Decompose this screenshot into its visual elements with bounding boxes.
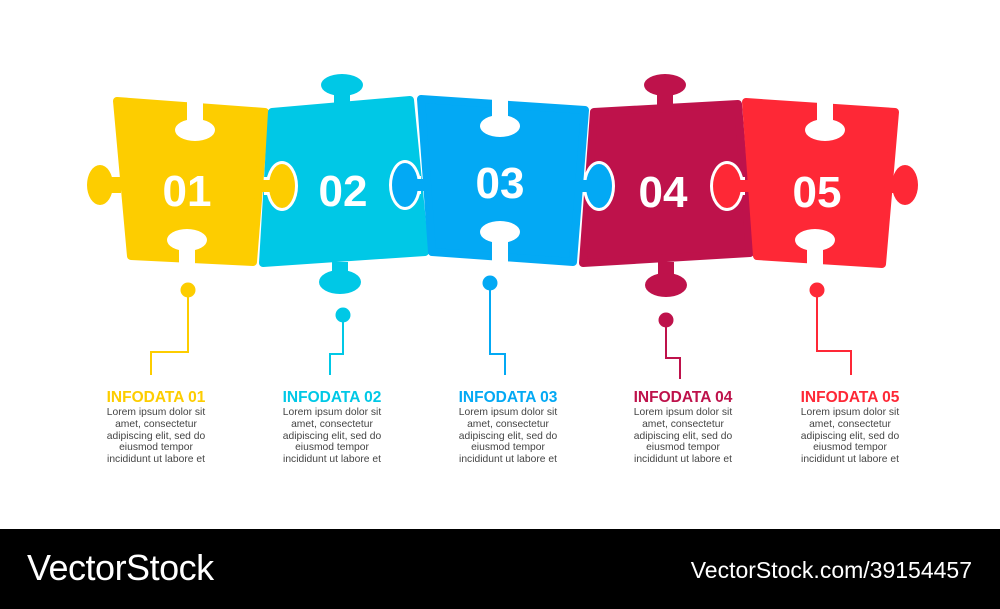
text 1: INFODATA 01 — [107, 389, 205, 406]
footer url: VectorStock.com/39154457 — [691, 557, 972, 583]
text 4: INFODATA 04 — [634, 389, 732, 406]
piece 3 — [421, 95, 585, 262]
connectors — [151, 283, 851, 379]
text 5: INFODATA 05 — [801, 389, 899, 406]
text 2: INFODATA 02 — [283, 389, 381, 406]
text 4: eiusmod tempor — [646, 442, 720, 453]
text 1: adipiscing elit, sed do — [107, 431, 205, 442]
piece 2 — [263, 74, 425, 294]
numbers: 05 — [793, 168, 841, 217]
text 3: Lorem ipsum dolor sit — [459, 407, 557, 418]
text 2: incididunt ut labore et — [283, 454, 381, 465]
text 3: INFODATA 03 — [459, 389, 557, 406]
text 2: adipiscing elit, sed do — [283, 431, 381, 442]
text 4: Lorem ipsum dolor sit — [634, 407, 732, 418]
text 1 — [107, 389, 206, 465]
numbers: 03 — [476, 159, 524, 208]
text 5: eiusmod tempor — [813, 442, 887, 453]
text 5: Lorem ipsum dolor sit — [801, 407, 899, 418]
text 3: amet, consectetur — [467, 419, 549, 430]
text 1: Lorem ipsum dolor sit — [107, 407, 205, 418]
text 1: amet, consectetur — [115, 419, 197, 430]
numbers: 04 — [639, 168, 688, 217]
numbers: 01 — [163, 167, 211, 216]
piece 1 — [87, 100, 265, 270]
numbers — [163, 159, 841, 217]
text 5: amet, consectetur — [809, 419, 891, 430]
numbers: 02 — [319, 167, 367, 216]
text 4: incididunt ut labore et — [634, 454, 732, 465]
text 3: adipiscing elit, sed do — [459, 431, 557, 442]
text 3 — [459, 389, 558, 465]
text 1: eiusmod tempor — [119, 442, 193, 453]
text 5 — [801, 389, 900, 465]
text 1: incididunt ut labore et — [107, 454, 205, 465]
text 4 — [634, 389, 732, 465]
piece 4 — [583, 74, 750, 297]
text 3: eiusmod tempor — [471, 442, 545, 453]
text 2: amet, consectetur — [291, 419, 373, 430]
text 5: incididunt ut labore et — [801, 454, 899, 465]
text 2: eiusmod tempor — [295, 442, 369, 453]
text 4: adipiscing elit, sed do — [634, 431, 732, 442]
text 3: incididunt ut labore et — [459, 454, 557, 465]
text 4: amet, consectetur — [642, 419, 724, 430]
text 2: Lorem ipsum dolor sit — [283, 407, 381, 418]
piece 5 — [746, 100, 918, 270]
tabs interlocking — [250, 160, 756, 211]
footer — [0, 529, 1000, 609]
footer logo: VectorStock — [27, 547, 214, 588]
text 5: adipiscing elit, sed do — [801, 431, 899, 442]
text 2 — [283, 389, 382, 465]
